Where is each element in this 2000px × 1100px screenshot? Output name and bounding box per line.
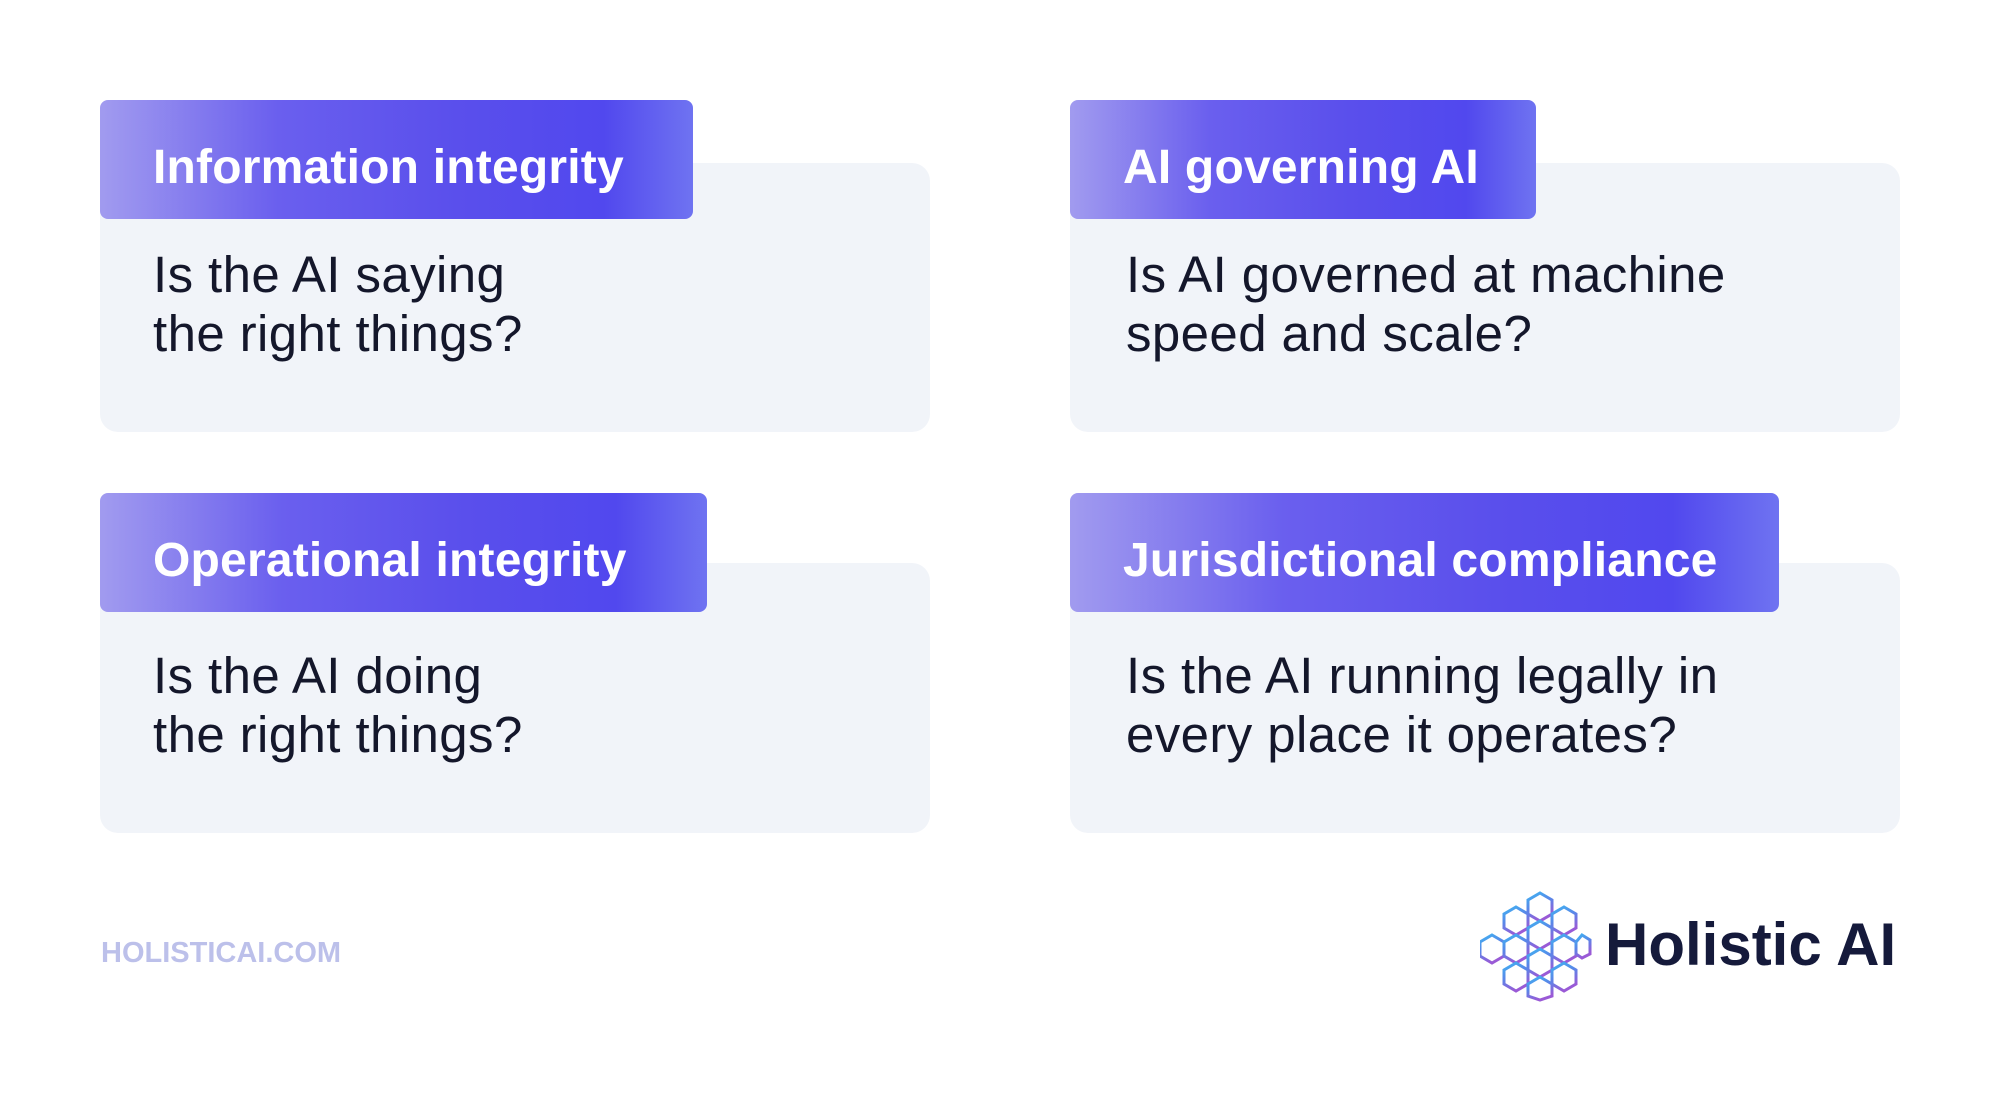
panel: jurisdictional compliance xyxy=(1070,493,1900,833)
logo text: Holistic AI xyxy=(1605,911,1896,978)
heading: AI governing AI xyxy=(1070,100,1536,219)
icon: hexagon cluster xyxy=(1480,891,1592,1002)
text: operational question: the right things? xyxy=(153,706,523,763)
text: information integrity question: Is the AI saying xyxy=(153,246,505,303)
footer url: HOLISTICAI.COM xyxy=(101,937,341,969)
text: information integrity question xyxy=(153,246,523,362)
text: operational question xyxy=(153,647,523,763)
panel: AI governing AI xyxy=(1070,100,1900,432)
heading: AI governing AI: AI governing AI xyxy=(1123,141,1479,194)
text: jurisdictional question: Is the AI running legally in xyxy=(1126,647,1718,704)
logo xyxy=(1480,891,1896,1002)
text: AI governing question xyxy=(1126,246,1726,362)
text: jurisdictional question xyxy=(1126,647,1718,763)
text: AI governing question: Is AI governed at machine xyxy=(1126,246,1726,303)
text: operational question: Is the AI doing xyxy=(153,647,482,704)
heading: operational integrity: Operational integrity xyxy=(153,534,627,587)
heading: jurisdictional compliance xyxy=(1070,493,1779,612)
text: jurisdictional question: every place it operates? xyxy=(1126,706,1677,763)
text: AI governing question: speed and scale? xyxy=(1126,305,1532,362)
heading: information integrity xyxy=(100,100,693,219)
panel: operational integrity xyxy=(100,493,930,833)
text: information integrity question: the right things? xyxy=(153,305,523,362)
heading: information integrity: Information integrity xyxy=(153,141,624,194)
panel: information integrity xyxy=(100,100,930,432)
heading: operational integrity xyxy=(100,493,707,612)
heading: jurisdictional compliance: Jurisdictional compliance xyxy=(1123,534,1718,587)
